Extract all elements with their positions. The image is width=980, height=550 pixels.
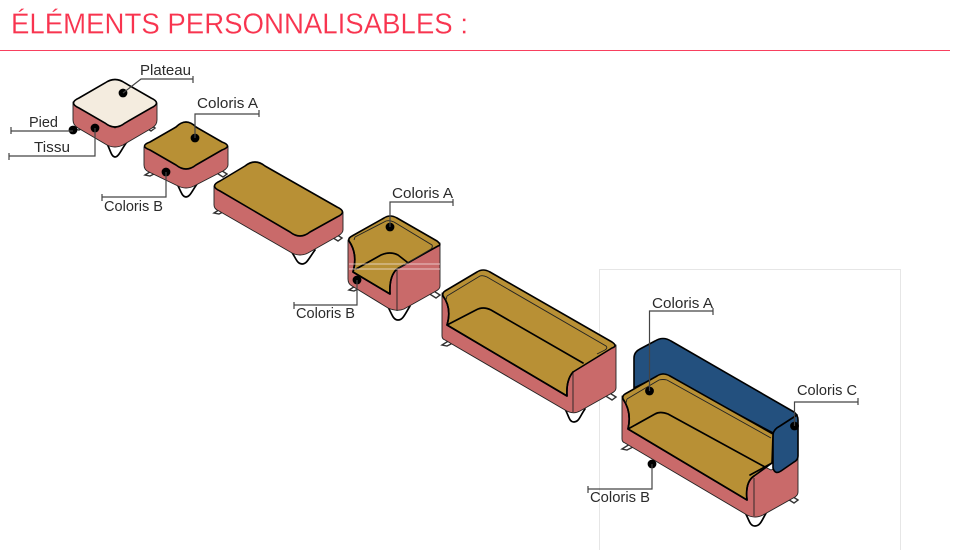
- header rule: [0, 50, 950, 51]
- callout: Coloris A, armchair: [386, 186, 453, 231]
- callout: Tissu: [9, 124, 99, 160]
- callout: Coloris A, armchair: Coloris A: [392, 186, 453, 202]
- callout: Coloris B, armchair: Coloris B: [296, 306, 355, 322]
- title: ÉLÉMENTS PERSONNALISABLES :: [11, 8, 468, 40]
- bench: long pouf: [214, 162, 343, 264]
- callout: Coloris A, sofa: [645, 296, 713, 395]
- callout: Plateau: Plateau: [140, 63, 191, 79]
- callout: Coloris B, armchair: [294, 276, 361, 322]
- callout: Pied: [11, 115, 77, 134]
- pouf: small coloris A and B: [144, 122, 228, 197]
- callout: Coloris C: Coloris C: [797, 383, 857, 399]
- callout: Coloris A, pouf: Coloris A: [197, 96, 258, 112]
- callout: Coloris B, sofa: Coloris B: [590, 490, 650, 506]
- callout: Coloris A, pouf: [191, 96, 259, 142]
- callout: Pied: Pied: [29, 115, 58, 131]
- sofa: two seats: [442, 270, 616, 422]
- frame: sofa panel: [600, 270, 900, 550]
- pouf: small with plateau: [73, 80, 157, 157]
- callout: Tissu: Tissu: [34, 140, 70, 156]
- sofa: with backrest coloris C: [622, 338, 798, 526]
- callout: Coloris B, sofa: [588, 460, 656, 506]
- callout: Coloris B, pouf: [102, 168, 170, 215]
- callout: Coloris B, pouf: Coloris B: [104, 199, 163, 215]
- callout: Coloris A, sofa: Coloris A: [652, 296, 713, 312]
- callout: Coloris C: [790, 383, 858, 430]
- callout: Plateau: [119, 63, 193, 97]
- armchair: [348, 216, 440, 320]
